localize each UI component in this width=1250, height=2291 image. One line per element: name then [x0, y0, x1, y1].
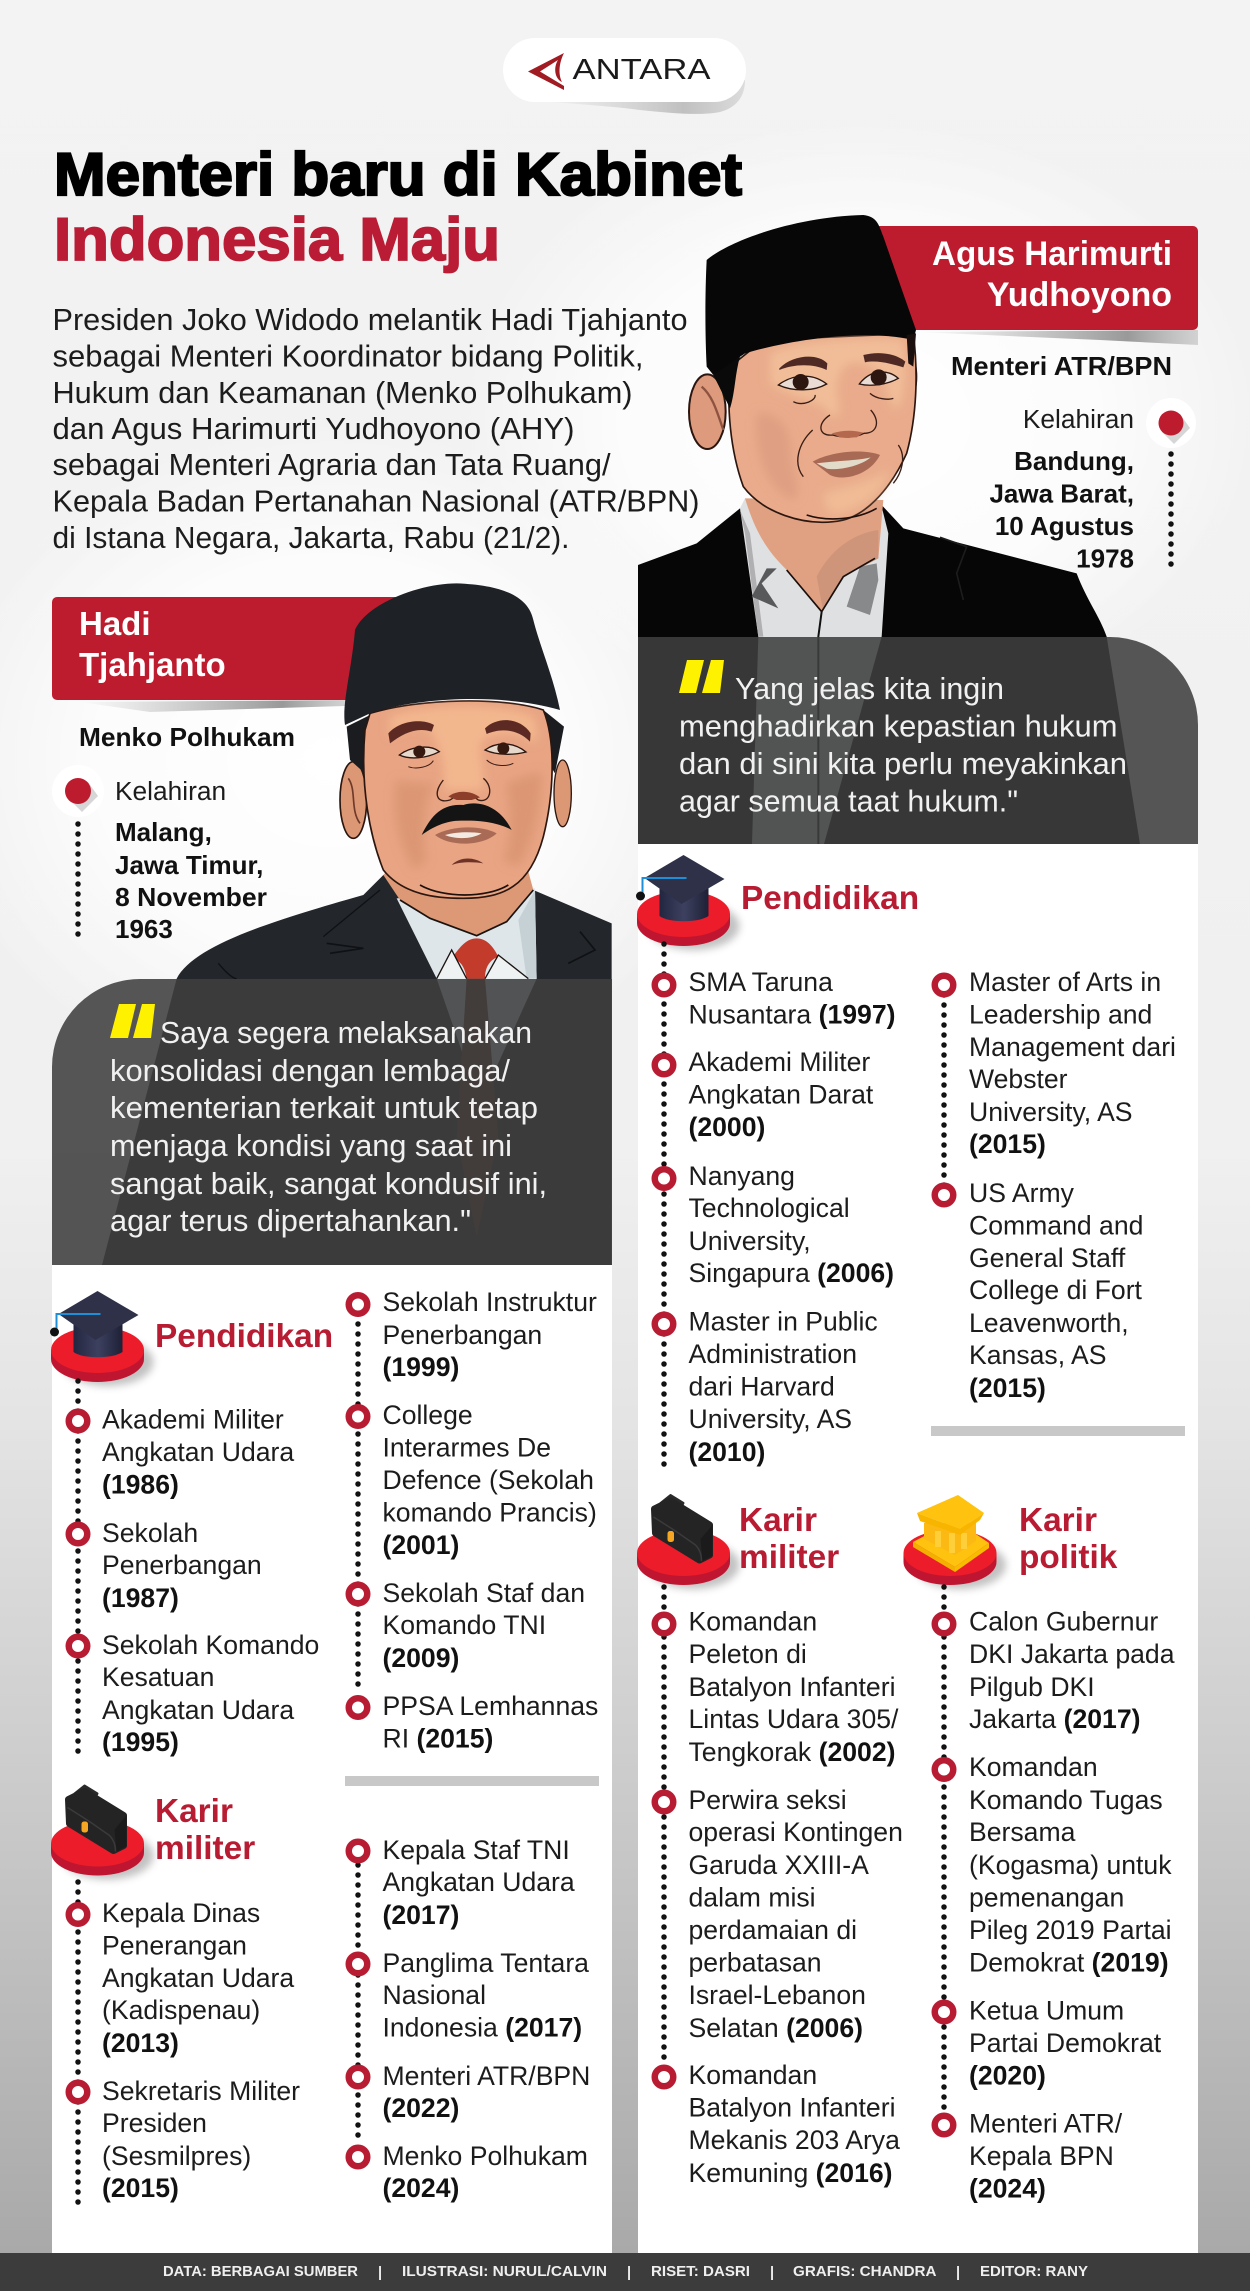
icon: briefcase	[51, 1786, 154, 1880]
item: College Interarmes	[349, 1400, 597, 1560]
icon: graduation cap	[636, 855, 740, 950]
item: Master of Arts: University, AS	[969, 1097, 1133, 1127]
item: Kepala Dinas: (Kadispenau)	[102, 1995, 260, 2025]
item: Perwira seksi: operasi Kontingen	[688, 1817, 903, 1847]
item: Komandan Peleton: Tengkorak (2002)	[688, 1737, 895, 1767]
item: Ketua Umum: (2020)	[969, 2060, 1046, 2090]
item: Kepala Staf TNI: Angkatan Udara	[382, 1867, 575, 1897]
item: Akademi Militer: Akademi Militer	[688, 1047, 870, 1077]
intro paragraph: Presiden Joko Widodo melantik Hadi Tjahjanto	[52, 303, 688, 337]
item: Menko Polhukam: (2024)	[382, 2173, 459, 2203]
item: Master of Arts	[935, 967, 1176, 1159]
birth info: Agus: 10 Agustus	[995, 511, 1134, 541]
item: Master in Public Administration: Master in Public	[688, 1306, 878, 1336]
item: Sekolah Staf: Komando TNI	[382, 1610, 546, 1640]
item: Menteri ATR/Kepala BPN: Kepala BPN	[969, 2141, 1114, 2171]
item: College Interarmes: College	[382, 1400, 473, 1430]
item: Sekolah Komando Kesatuan: Kesatuan	[102, 1662, 214, 1692]
quote text: agar semua taat hukum."	[679, 784, 1018, 818]
intro paragraph: di Istana Negara, Jakarta, Rabu (21/2).	[52, 521, 570, 555]
item: Kepala Dinas: Penerangan	[102, 1930, 247, 1960]
item: Menteri ATR/Kepala BPN: (2024)	[969, 2174, 1046, 2204]
item: US Army	[935, 1178, 1143, 1403]
role: Menteri ATR/BPN: Menteri ATR/BPN	[951, 351, 1172, 381]
quote text: menghadirkan kepastian hukum	[679, 710, 1118, 744]
title: Indonesia Maju	[54, 206, 500, 273]
heading: Karir militer: Karir	[739, 1502, 817, 1539]
item: Master in Public Administration: Administration	[688, 1339, 857, 1369]
item: Sekolah Staf: (2009)	[382, 1643, 459, 1673]
item: Menko Polhukam	[349, 2141, 588, 2203]
section: Karir militer (Agus)	[637, 1495, 903, 2188]
item: US Army: Kansas, AS	[969, 1340, 1106, 1370]
item: Sekolah Instruktur: (1999)	[382, 1352, 459, 1382]
item: College Interarmes: komando Prancis)	[382, 1498, 597, 1528]
item: Akademi Militer	[69, 1404, 294, 1500]
name banner: Agus	[860, 226, 1198, 345]
item: Komandan Kogasma: Bersama	[969, 1817, 1076, 1847]
name banner: Hadi: Tjahjanto	[79, 646, 226, 683]
quote text: Saya segera melaksanakan	[160, 1016, 532, 1050]
item: Sekolah Komando Kesatuan: (1995)	[102, 1727, 179, 1757]
quote text: Yang jelas kita ingin	[735, 672, 1004, 706]
intro paragraph	[52, 303, 700, 555]
item: Sekolah Staf	[349, 1578, 585, 1673]
item: Perwira seksi: Perwira seksi	[688, 1785, 847, 1815]
footer credits: EDITOR: RANY	[980, 2264, 1088, 2280]
item: Perwira seksi: dalam misi	[688, 1882, 816, 1912]
quote text: sangat baik, sangat kondusif ini,	[110, 1167, 547, 1201]
item: Sekretaris Militer: (2015)	[102, 2173, 179, 2203]
item: Menteri ATR/BPN: (2022)	[382, 2093, 459, 2123]
item: PPSA Lemhannas: PPSA Lemhannas	[382, 1691, 598, 1721]
item: Master in Public Administration: (2010)	[688, 1437, 765, 1467]
intro paragraph: Kepala Badan Pertanahan Nasional (ATR/BPN)	[52, 484, 700, 518]
birth info: Hadi: 1963	[115, 914, 173, 944]
footer credits: GRAFIS: CHANDRA	[793, 2264, 937, 2280]
item: Komandan Peleton: Peleton di	[688, 1639, 807, 1669]
item: Kepala Dinas: (2013)	[102, 2028, 179, 2058]
item: Master of Arts: (2015)	[969, 1129, 1046, 1159]
item: Calon Gubernur: Jakarta (2017)	[969, 1704, 1140, 1734]
item: Akademi Militer: (1986)	[102, 1470, 179, 1500]
birth info: Hadi	[52, 765, 267, 944]
item: Ketua Umum	[935, 1996, 1162, 2090]
item: Panglima: Panglima Tentara	[382, 1948, 589, 1978]
item: US Army: College di Fort	[969, 1275, 1143, 1305]
item: Calon Gubernur: Pilgub DKI	[969, 1672, 1095, 1702]
footer credits: ILUSTRASI: NURUL/CALVIN	[402, 2264, 607, 2280]
item: Komandan Peleton: Komandan	[688, 1606, 817, 1636]
item: PPSA Lemhannas: RI (2015)	[382, 1724, 493, 1754]
quote mark	[110, 1004, 155, 1038]
quote text: konsolidasi dengan lembaga/	[110, 1054, 511, 1088]
item: Nanyang	[655, 1161, 894, 1288]
quote panel: Hadi	[52, 979, 612, 1265]
item: Sekolah Penerbangan	[69, 1518, 262, 1613]
item: Perwira seksi: perbatasan	[688, 1948, 822, 1978]
role: Menko Polhukam: Menko Polhukam	[79, 722, 295, 752]
item: Calon Gubernur: Calon Gubernur	[969, 1606, 1158, 1636]
item: Kepala Staf TNI: (2017)	[382, 1900, 459, 1930]
panel: Hadi Tjahjanto	[50, 583, 612, 2253]
item: Menteri ATR/Kepala BPN	[935, 2108, 1123, 2204]
item: Menteri ATR/Kepala BPN: Menteri ATR/	[969, 2108, 1123, 2138]
birth info: Hadi: Jawa Timur,	[115, 850, 263, 880]
item: US Army: General Staff	[969, 1243, 1126, 1273]
item: Sekolah Staf: Sekolah Staf dan	[382, 1578, 585, 1608]
intro paragraph: dan Agus Harimurti Yudhoyono (AHY)	[52, 412, 574, 446]
logo: ANTARA: ANTARA	[572, 54, 711, 86]
item: Komandan Kogasma: pemenangan	[969, 1882, 1124, 1912]
item: College Interarmes: Interarmes De	[382, 1432, 551, 1462]
item: Perwira seksi: Selatan (2006)	[688, 2013, 863, 2043]
item: Akademi Militer: Akademi Militer	[102, 1404, 284, 1434]
section: Karir militer (Hadi)	[51, 1786, 590, 2204]
item: Komandan Batalyon: Mekanis 203 Arya	[688, 2125, 900, 2155]
item: Akademi Militer: (2000)	[688, 1112, 765, 1142]
item: SMA Taruna: SMA Taruna	[688, 967, 833, 997]
item: Nanyang: Nanyang	[688, 1161, 795, 1191]
heading: Karir politik: Karir	[1019, 1502, 1097, 1539]
item: Perwira seksi: Garuda XXIII-A	[688, 1850, 869, 1880]
footer credits: |	[378, 2265, 382, 2281]
item: Sekretaris Militer: Sekretaris Militer	[102, 2076, 300, 2106]
footer credits: RISET: DASRI	[651, 2264, 750, 2280]
quote text	[679, 672, 1127, 818]
item: Komandan Batalyon: Kemuning (2016)	[688, 2158, 893, 2188]
item: Panglima: Indonesia (2017)	[382, 2012, 582, 2042]
heading: Pendidikan: Pendidikan	[741, 880, 919, 917]
quote text: dan di sini kita perlu meyakinkan	[679, 747, 1127, 781]
panel: Agus Harimurti Yudhoyono	[636, 215, 1198, 2253]
item: Sekretaris Militer: (Sesmilpres)	[102, 2141, 251, 2171]
name banner: Hadi	[52, 597, 402, 712]
quote mark	[679, 660, 724, 693]
item: Sekolah Penerbangan: Penerbangan	[102, 1550, 262, 1580]
birth info: Hadi: 8 November	[115, 882, 267, 912]
item: College Interarmes: (2001)	[382, 1530, 459, 1560]
logo: ANTARA	[503, 38, 746, 114]
birth info: Agus	[989, 398, 1196, 574]
item: Komandan Kogasma: Pileg 2019 Partai	[969, 1915, 1172, 1945]
section: Karir politik (Agus)	[904, 1495, 1175, 2204]
item: Komandan Kogasma: Demokrat (2019)	[969, 1948, 1169, 1978]
item: Kepala Staf TNI: Kepala Staf TNI	[382, 1835, 570, 1865]
item: Kepala Dinas: Kepala Dinas	[102, 1898, 260, 1928]
item: Master of Arts: Management dari	[969, 1032, 1176, 1062]
item: PPSA Lemhannas	[349, 1691, 598, 1754]
item: Menko Polhukam: Menko Polhukam	[382, 2141, 588, 2171]
heading: Karir militer: militer	[155, 1830, 255, 1867]
heading: Karir militer: militer	[739, 1539, 839, 1576]
quote panel: Agus	[638, 637, 1198, 844]
item: Akademi Militer: Angkatan Udara	[102, 1437, 294, 1467]
birth info: Hadi: Malang,	[115, 817, 212, 847]
item: Nanyang: University,	[688, 1226, 811, 1256]
item: Sekolah Penerbangan: (1987)	[102, 1583, 179, 1613]
footer credits: |	[770, 2265, 774, 2281]
title	[54, 141, 742, 273]
item: College Interarmes: Defence (Sekolah	[382, 1465, 594, 1495]
heading: Pendidikan: Pendidikan	[155, 1318, 333, 1355]
item: Menteri ATR/BPN: Menteri ATR/BPN	[382, 2061, 590, 2091]
item: Sekolah Penerbangan: Sekolah	[102, 1518, 198, 1548]
birth info: Agus: Bandung,	[1014, 446, 1134, 476]
item: Komandan Peleton: Batalyon Infanteri	[688, 1672, 895, 1702]
item: US Army: Command and	[969, 1210, 1143, 1240]
item: Akademi Militer: Angkatan Darat	[688, 1080, 874, 1110]
item: Sekolah Komando Kesatuan: Sekolah Komando	[102, 1630, 319, 1660]
birth info: Agus: 1978	[1076, 544, 1134, 574]
footer credits: |	[956, 2265, 960, 2281]
item: Master in Public Administration	[655, 1306, 878, 1467]
item: Kepala Dinas: Angkatan Udara	[102, 1963, 294, 1993]
item: Calon Gubernur	[935, 1606, 1175, 1734]
item: Komandan Kogasma: (Kogasma) untuk	[969, 1850, 1172, 1880]
item: Kepala Staf TNI	[349, 1835, 575, 1930]
title: Menteri baru di Kabinet	[54, 141, 742, 208]
item: Komandan Peleton	[655, 1606, 899, 1767]
item: Panglima: Nasional	[382, 1980, 486, 2010]
item: Sekolah Instruktur: Penerbangan	[382, 1320, 542, 1350]
item: Perwira seksi: perdamaian di	[688, 1915, 857, 1945]
quote text	[110, 1016, 547, 1238]
quote text: kementerian terkait untuk tetap	[110, 1091, 538, 1125]
item: Calon Gubernur: DKI Jakarta pada	[969, 1639, 1175, 1669]
item: Komandan Kogasma: Komando Tugas	[969, 1785, 1163, 1815]
name banner: Agus: Yudhoyono	[987, 276, 1172, 314]
item: Komandan Batalyon: Komandan	[688, 2060, 817, 2090]
item: Master in Public Administration: dari Harvard	[688, 1372, 835, 1402]
intro paragraph: sebagai Menteri Koordinator bidang Politik,	[52, 340, 644, 374]
portrait: Agus	[638, 215, 1140, 844]
heading: Karir politik: politik	[1019, 1539, 1118, 1576]
white panel: Hadi	[52, 1265, 612, 2253]
item: Master of Arts: Leadership and	[969, 1000, 1152, 1030]
footer credits: |	[627, 2265, 631, 2281]
item: Akademi Militer	[655, 1047, 874, 1142]
name banner: Agus: Agus Harimurti	[932, 235, 1172, 273]
icon: building	[904, 1495, 1006, 1589]
soft glow: left	[0, 420, 730, 1100]
intro paragraph: Hukum dan Keamanan (Menko Polhukam)	[52, 376, 632, 410]
item: Panglima	[349, 1948, 589, 2042]
item: Sekolah Instruktur: Sekolah Instruktur	[382, 1287, 597, 1317]
heading: Karir militer: Karir	[155, 1793, 233, 1830]
item: Sekretaris Militer: Presiden	[102, 2108, 207, 2138]
item: SMA Taruna	[655, 967, 895, 1030]
quote text: menjaga kondisi yang saat ini	[110, 1129, 512, 1163]
item: SMA Taruna: Nusantara (1997)	[688, 1000, 895, 1030]
icon: briefcase	[637, 1495, 740, 1589]
item: US Army: Leavenworth,	[969, 1308, 1129, 1338]
item: Ketua Umum: Partai Demokrat	[969, 2028, 1162, 2058]
quote text: agar terus dipertahankan."	[110, 1204, 471, 1238]
item: Komandan Peleton: Lintas Udara 305/	[688, 1704, 899, 1734]
item: Komandan Batalyon: Batalyon Infanteri	[688, 2092, 895, 2122]
section: Pendidikan (Agus)	[636, 855, 1176, 1467]
portrait: Hadi	[102, 583, 612, 1265]
white panel: Agus	[638, 844, 1198, 2253]
icon: graduation cap	[50, 1291, 154, 1386]
item: Master of Arts: Master of Arts in	[969, 967, 1161, 997]
item: Komandan Kogasma: Komandan	[969, 1752, 1098, 1782]
item: Perwira seksi: Israel-Lebanon	[688, 1980, 866, 2010]
section: Pendidikan (Hadi)	[50, 1287, 598, 1758]
birth info: Agus: Jawa Barat,	[989, 478, 1134, 508]
item: Perwira seksi	[655, 1785, 903, 2043]
item: Kepala Dinas	[69, 1898, 294, 2058]
item: US Army: (2015)	[969, 1373, 1046, 1403]
birth info: Hadi: Kelahiran	[115, 776, 226, 806]
item: Menteri ATR/BPN	[349, 2061, 590, 2123]
footer credits: DATA: BERBAGAI SUMBER	[163, 2264, 359, 2280]
item: Ketua Umum: Ketua Umum	[969, 1996, 1124, 2026]
item: Nanyang: Technological	[688, 1193, 850, 1223]
footer credits	[0, 2253, 1250, 2291]
item: Sekolah Komando Kesatuan: Angkatan Udara	[102, 1695, 294, 1725]
item: Master of Arts: Webster	[969, 1064, 1068, 1094]
item: Komandan Kogasma	[935, 1752, 1172, 1978]
name banner: Hadi: Hadi	[79, 605, 151, 642]
item: Sekolah Komando Kesatuan	[69, 1630, 319, 1757]
item: Master in Public Administration: University, AS	[688, 1404, 852, 1434]
soft glow: right	[460, 120, 1250, 720]
item: Nanyang: Singapura (2006)	[688, 1258, 894, 1288]
item: Sekretaris Militer	[69, 2076, 300, 2203]
intro paragraph: sebagai Menteri Agraria dan Tata Ruang/	[52, 448, 611, 482]
item: Komandan Batalyon	[655, 2060, 900, 2188]
item: US Army: US Army	[969, 1178, 1075, 1208]
birth info: Agus: Kelahiran	[1023, 404, 1134, 434]
item: Sekolah Instruktur	[349, 1287, 597, 1382]
